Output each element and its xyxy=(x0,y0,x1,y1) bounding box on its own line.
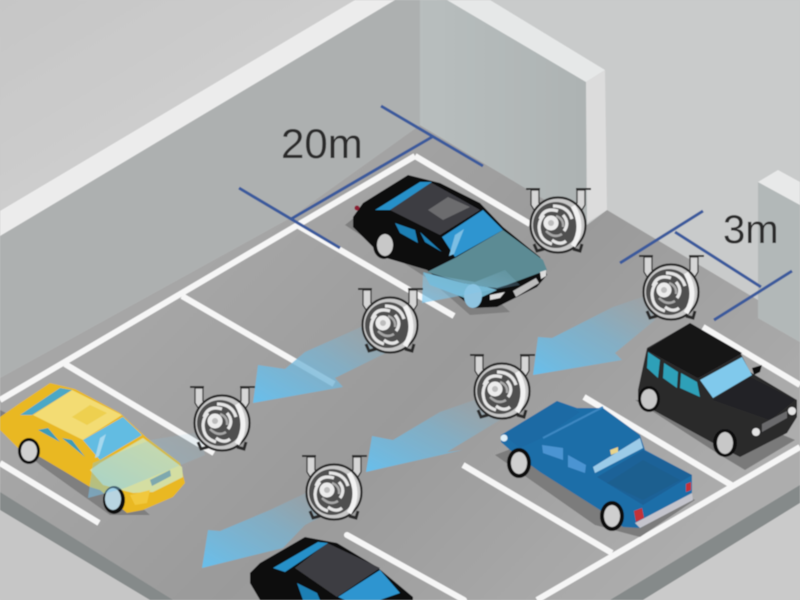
air stream over yellow car xyxy=(88,432,205,498)
fan 4 xyxy=(470,355,535,418)
dimension lines: 3m xyxy=(620,211,792,320)
fan 1 xyxy=(526,189,591,252)
floor xyxy=(0,125,800,600)
fan 5 xyxy=(190,387,255,450)
air stream: fan to lower left aisle xyxy=(202,490,335,568)
right partition wall xyxy=(758,170,800,342)
blue pickup truck xyxy=(495,401,695,537)
fan 2 xyxy=(358,289,423,352)
air stream: fan to right aisle xyxy=(533,296,655,375)
ceiling slab left xyxy=(0,0,358,212)
dimension lines: 20m xyxy=(239,106,483,248)
parking bay lines xyxy=(0,156,800,600)
left wall band xyxy=(0,0,420,378)
yellow car xyxy=(0,383,185,515)
curb and outer pavement bottom right xyxy=(610,485,800,600)
black sedan xyxy=(345,175,547,315)
label: 3m: 3m xyxy=(723,208,779,252)
label: 20m: 20m xyxy=(281,120,363,167)
air stream: fan to centre aisle xyxy=(366,398,500,472)
partition wall xyxy=(420,0,607,225)
curb and outer pavement bottom left xyxy=(0,492,173,600)
black car bottom xyxy=(250,537,413,600)
white ceiling beam xyxy=(0,0,395,236)
black SUV xyxy=(635,323,797,470)
fan 3 xyxy=(639,256,704,320)
fan 6 xyxy=(302,456,367,520)
air stream: fan to middle bay xyxy=(253,322,392,403)
air stream over sedan xyxy=(422,270,520,303)
